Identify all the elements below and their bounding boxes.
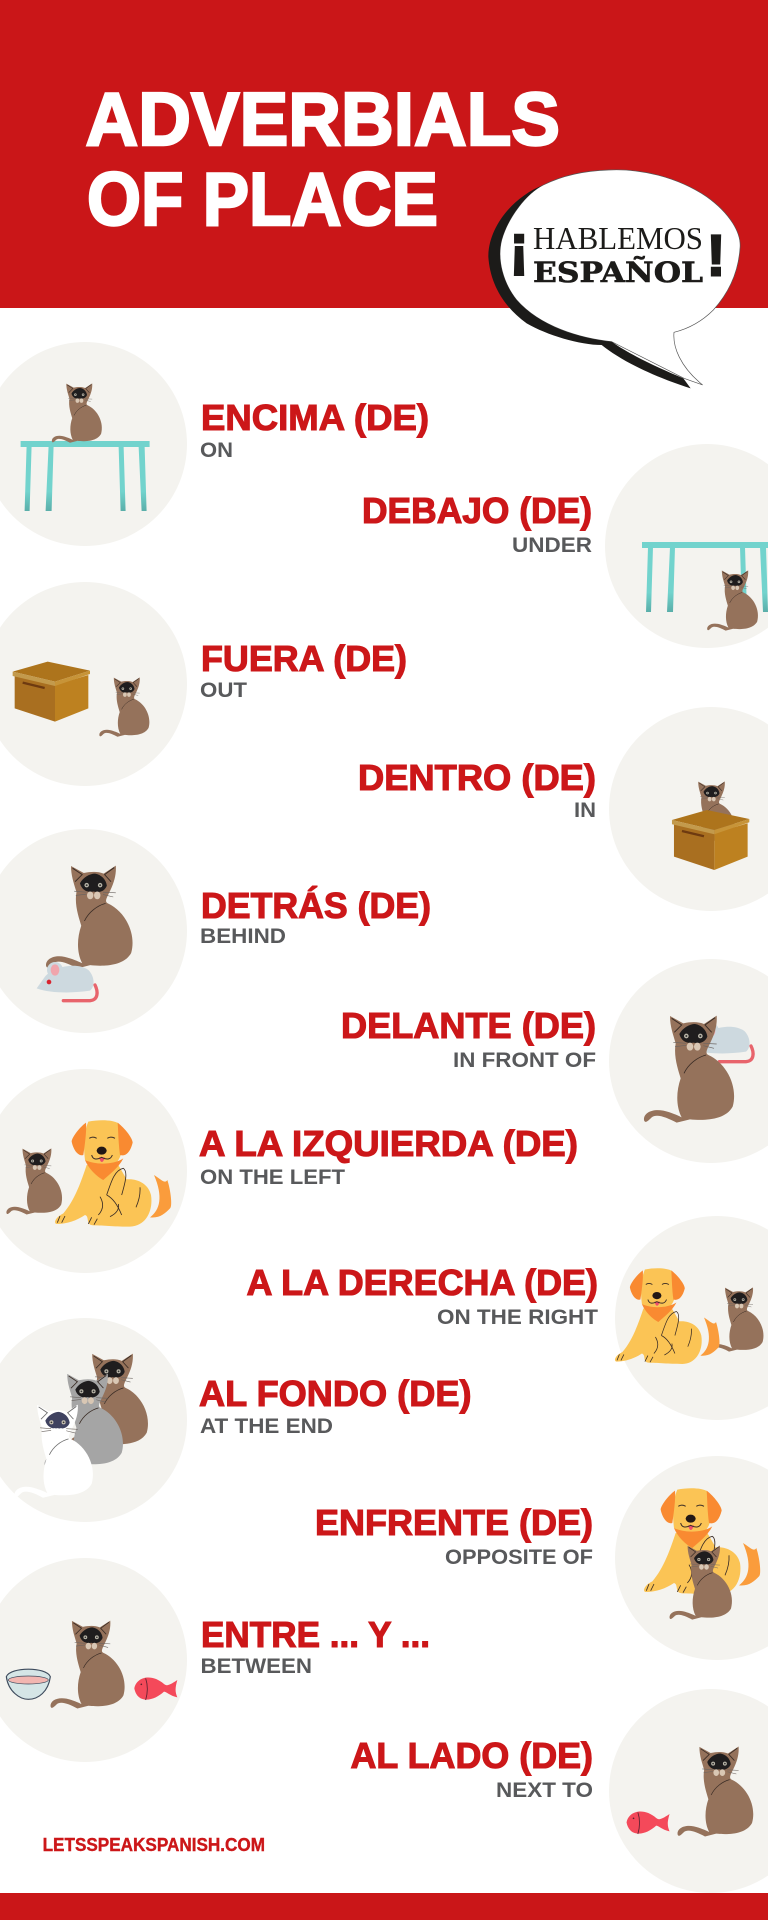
icon: cat [644, 1016, 734, 1123]
icon: mouse [693, 1023, 753, 1062]
icon: mouse [37, 962, 97, 1001]
icon: dog [644, 1488, 760, 1595]
circle [609, 959, 768, 1163]
row: dentro [358, 707, 768, 911]
heading: FUERA (DE) [201, 638, 407, 679]
row: debajo [362, 444, 768, 648]
translation: NEXT TO [496, 1778, 593, 1802]
translation: ON THE RIGHT [437, 1305, 598, 1329]
icon: cat [6, 1148, 62, 1215]
heading: ENFRENTE (DE) [315, 1502, 593, 1543]
row: a la izquierda [0, 1069, 578, 1273]
header band [0, 0, 768, 308]
row: delante [341, 959, 768, 1163]
circle [0, 582, 187, 786]
circle [0, 1558, 187, 1762]
heading: A LA IZQUIERDA (DE) [199, 1123, 578, 1164]
row: entre [0, 1558, 430, 1762]
heading: DELANTE (DE) [341, 1005, 596, 1046]
circle [0, 1069, 187, 1273]
circle [0, 342, 187, 546]
icon: gray cat [45, 1374, 123, 1467]
row: al fondo [0, 1318, 472, 1522]
heading: AL LADO (DE) [350, 1735, 593, 1776]
speech bubble: Hablemos Español [488, 170, 740, 388]
icon: cat [678, 1747, 753, 1836]
bubble text: HABLEMOS [533, 220, 703, 256]
row: al lado [350, 1689, 768, 1893]
circle [615, 1216, 768, 1420]
speech bubble: Hablemos Español: ESPAÑOL [533, 256, 703, 289]
translation: UNDER [512, 533, 592, 557]
icon: fish [627, 1812, 670, 1834]
title: ADVERBIALS [86, 77, 560, 161]
heading: A LA DERECHA (DE) [246, 1262, 598, 1303]
icon: bowl [6, 1669, 50, 1699]
circle [0, 1318, 187, 1522]
website credit: LETSSPEAKSPANISH.COM [43, 1835, 265, 1855]
title: OF PLACE [87, 157, 438, 241]
icon: cat [46, 866, 133, 968]
circle [615, 1456, 768, 1660]
circle [605, 444, 768, 648]
heading: DENTRO (DE) [358, 757, 596, 798]
icon: dog [55, 1120, 171, 1227]
heading: AL FONDO (DE) [199, 1373, 472, 1414]
bubble shape [488, 170, 740, 388]
translation: ON THE LEFT [200, 1165, 345, 1189]
title [86, 77, 560, 241]
heading: ENTRE ... Y ... [201, 1614, 430, 1655]
speech bubble: Hablemos Español: ! [706, 224, 726, 288]
icon: fish [134, 1678, 177, 1700]
circle [0, 829, 187, 1033]
icon: white cat [15, 1405, 93, 1498]
footer band [0, 1893, 768, 1920]
row: encima [0, 342, 429, 546]
icon: cat [709, 1287, 763, 1352]
row: a la derecha [246, 1216, 768, 1420]
icon: cat [683, 781, 735, 842]
translation: BETWEEN [200, 1654, 312, 1678]
icon: cat [52, 383, 102, 443]
icon: table [642, 542, 768, 612]
icon: cat [51, 1621, 125, 1709]
icon: cat [707, 570, 758, 631]
translation: OUT [200, 678, 247, 702]
row: detras [0, 829, 431, 1033]
icon: box [13, 662, 90, 722]
row: fuera [0, 582, 407, 786]
translation: IN FRONT OF [453, 1048, 596, 1072]
icon: brown cat [70, 1354, 148, 1447]
translation: OPPOSITE OF [445, 1545, 593, 1569]
circle [609, 707, 768, 911]
translation: IN [574, 798, 596, 822]
speech bubble: Hablemos Español: ¡ [509, 214, 529, 278]
icon: dog [615, 1268, 720, 1364]
heading: DEBAJO (DE) [362, 490, 592, 531]
heading: ENCIMA (DE) [201, 397, 429, 438]
icon: cat [670, 1545, 732, 1620]
row: enfrente [315, 1456, 768, 1660]
icon: cat [99, 677, 149, 737]
translation: AT THE END [200, 1414, 333, 1438]
icon: table [21, 441, 150, 511]
translation: ON [200, 438, 233, 462]
heading: DETRÁS (DE) [201, 885, 431, 926]
translation: BEHIND [200, 924, 286, 948]
circle [609, 1689, 768, 1893]
icon: box [672, 810, 749, 870]
